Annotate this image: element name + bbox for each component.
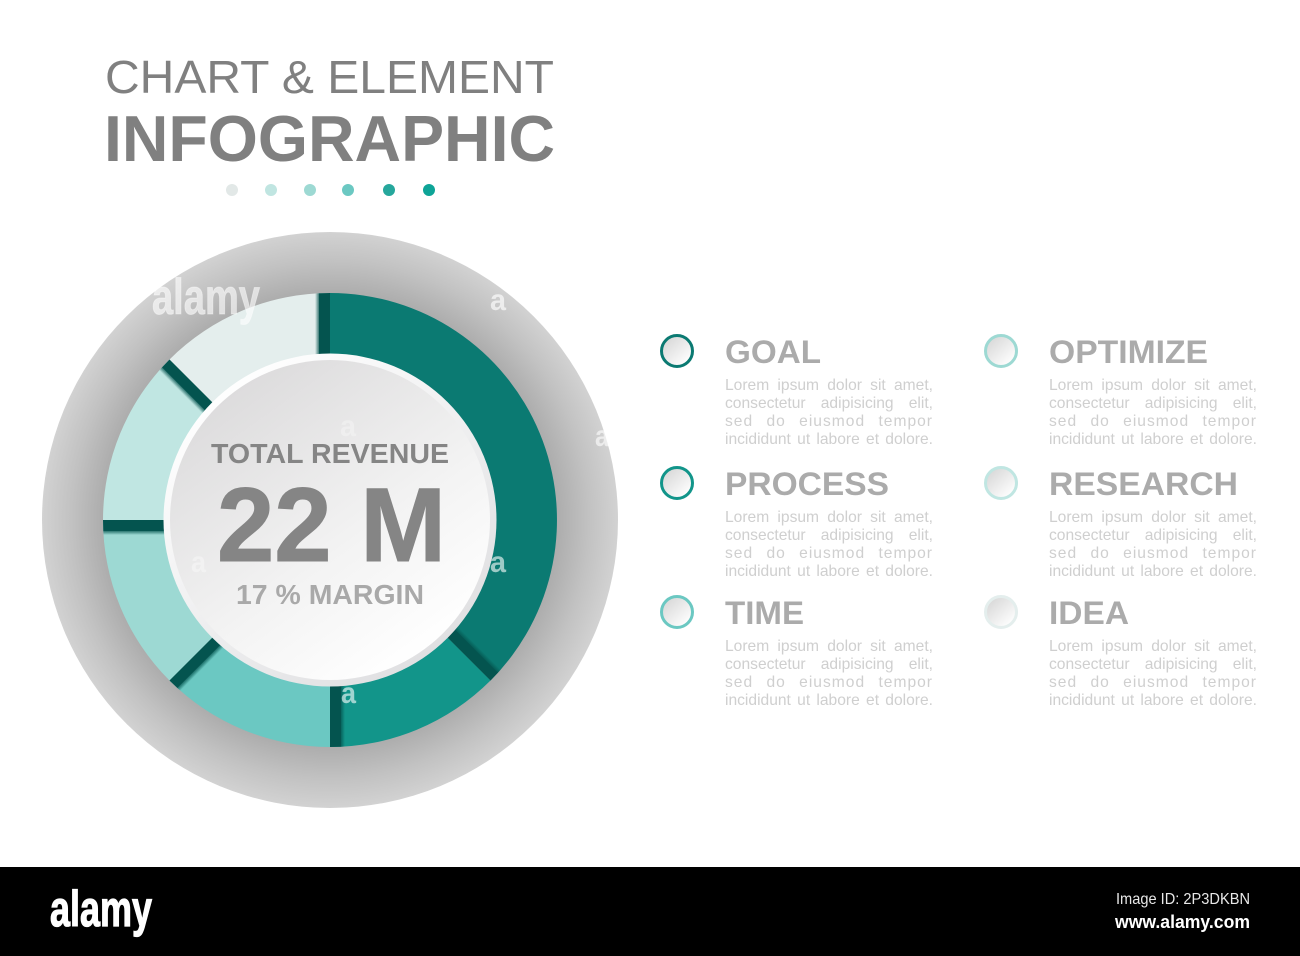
text block: process: consectetur adipisicing elit,: [725, 527, 933, 544]
watermark marks: [152, 269, 609, 710]
text block: optimize: [1049, 377, 1257, 448]
marker: time: [662, 596, 692, 628]
marker: optimize: [986, 336, 1016, 366]
dot row: [226, 184, 435, 196]
centre disc rim: [164, 354, 496, 686]
segment: time: [170, 637, 330, 747]
watermark marks: a: [490, 546, 506, 579]
title: [104, 51, 555, 175]
text block: optimize: incididunt ut labore et dolore.: [1049, 431, 1257, 448]
watermark marks: a: [341, 677, 356, 710]
text block: time: [725, 638, 933, 709]
footer image id: Image ID: 2P3DKBN: [1116, 891, 1250, 908]
segment shadow strips: [100, 290, 503, 750]
heading: research: RESEARCH: [1049, 466, 1238, 502]
centre label: total revenue: TOTAL REVENUE: [211, 438, 449, 469]
heading: optimize: OPTIMIZE: [1049, 334, 1208, 370]
text block: goal: incididunt ut labore et dolore.: [725, 431, 933, 448]
heading: time: TIME: [725, 595, 804, 631]
segment: optimize: [103, 520, 213, 680]
segment: goal: [330, 293, 557, 680]
text block: idea: consectetur adipisicing elit,: [1049, 656, 1257, 673]
text block: goal: [725, 377, 933, 448]
text block: process: incididunt ut labore et dolore.: [725, 563, 933, 580]
title line: chart & element: CHART & ELEMENT: [105, 51, 554, 103]
text block: research: [1049, 509, 1257, 580]
text block: optimize: sed do eiusmod tempor: [1049, 413, 1257, 430]
footer url: www.alamy.com: [1114, 912, 1250, 932]
text block: optimize: consectetur adipisicing elit,: [1049, 395, 1257, 412]
text block: idea: Lorem ipsum dolor sit amet,: [1049, 638, 1257, 655]
heading: goal: GOAL: [725, 334, 821, 370]
marker: research: [986, 468, 1016, 498]
text block: goal: sed do eiusmod tempor: [725, 413, 933, 430]
watermark marks: a: [340, 410, 356, 443]
watermark marks: alamy: [152, 269, 260, 325]
segment: idea: [170, 293, 330, 403]
outer grey disc: [42, 232, 618, 808]
watermark marks: a: [191, 546, 206, 579]
watermark marks: a: [490, 284, 506, 317]
segment: research: [103, 360, 213, 520]
segment: process: [330, 637, 490, 747]
text block: idea: sed do eiusmod tempor: [1049, 674, 1257, 691]
text block: research: consectetur adipisicing elit,: [1049, 527, 1257, 544]
text block: research: Lorem ipsum dolor sit amet,: [1049, 509, 1257, 526]
text block: process: Lorem ipsum dolor sit amet,: [725, 509, 933, 526]
text block: idea: [1049, 638, 1257, 709]
text block: optimize: Lorem ipsum dolor sit amet,: [1049, 377, 1257, 394]
centre disc face: [170, 360, 490, 680]
title line: infographic: INFOGRAPHIC: [104, 102, 555, 175]
text block: time: Lorem ipsum dolor sit amet,: [725, 638, 933, 655]
text block: process: [725, 509, 933, 580]
text block: goal: consectetur adipisicing elit,: [725, 395, 933, 412]
marker: process: [662, 468, 692, 498]
text block: goal: Lorem ipsum dolor sit amet,: [725, 377, 933, 394]
heading: process: PROCESS: [725, 466, 889, 502]
text block: research: incididunt ut labore et dolore.: [1049, 563, 1257, 580]
text block: time: consectetur adipisicing elit,: [725, 656, 933, 673]
donut chart: [42, 232, 618, 808]
footer bar: [0, 867, 1300, 956]
marker: goal: [662, 336, 692, 366]
text block: research: sed do eiusmod tempor: [1049, 545, 1257, 562]
footer logo: alamy: [50, 881, 152, 937]
heading: idea: IDEA: [1049, 595, 1129, 631]
text block: time: sed do eiusmod tempor: [725, 674, 933, 691]
text block: idea: incididunt ut labore et dolore.: [1049, 692, 1257, 709]
centre value: 22 M: 22 M: [217, 467, 446, 584]
text block: process: sed do eiusmod tempor: [725, 545, 933, 562]
text block: time: incididunt ut labore et dolore.: [725, 692, 933, 709]
centre label: margin: 17 % MARGIN: [236, 579, 424, 610]
watermark marks: a: [595, 420, 609, 453]
marker: idea: [986, 596, 1016, 628]
